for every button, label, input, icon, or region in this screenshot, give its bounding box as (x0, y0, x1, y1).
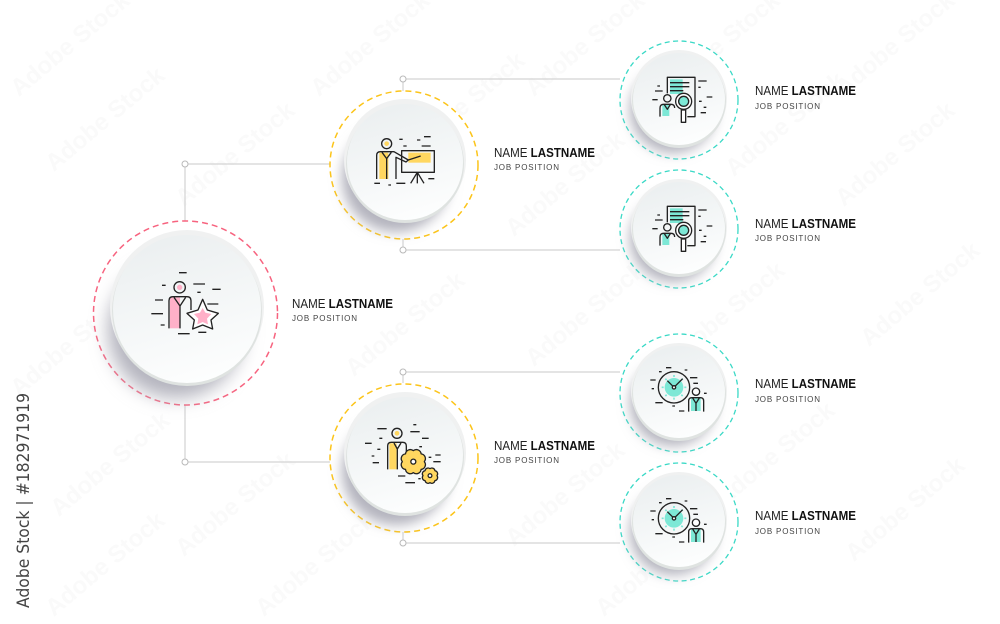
watermark pattern: Adobe Stock (40, 61, 171, 177)
text: upper manager name (494, 146, 595, 172)
watermark pattern: Adobe Stock (400, 46, 531, 162)
text: lower manager name: NAME LASTNAME (494, 439, 595, 453)
node: top-level manager (94, 221, 393, 405)
watermark pattern: Adobe Stock (520, 256, 651, 372)
node: report 1 (620, 41, 856, 159)
watermark pattern: Adobe Stock (840, 451, 971, 567)
watermark pattern: Adobe Stock (5, 286, 136, 402)
watermark pattern: Adobe Stock (340, 266, 471, 382)
watermark pattern: Adobe Stock (830, 96, 961, 212)
text: report 2 name: JOB POSITION (755, 234, 820, 243)
watermark pattern: Adobe Stock (500, 436, 631, 552)
icon: document with magnifier (652, 77, 712, 122)
text: report 3 name (755, 377, 856, 404)
text: report 3 name: JOB POSITION (755, 395, 820, 404)
node: report 3 (620, 334, 856, 452)
icon: person with gears (365, 425, 441, 483)
text: upper manager name: NAME LASTNAME (494, 146, 595, 160)
node: report 2 (620, 170, 856, 288)
watermark pattern: Adobe Stock (170, 446, 301, 562)
watermark pattern: Adobe Stock (660, 256, 791, 372)
icon: clock with person (650, 368, 707, 412)
node: upper manager (330, 91, 595, 239)
icon: presenter with board (374, 137, 434, 185)
connector lines (182, 76, 620, 546)
icon: document with magnifier (652, 206, 712, 251)
text: lower manager name (494, 439, 595, 465)
watermark pattern: Adobe Stock (45, 406, 176, 522)
text: report 1 name: JOB POSITION (755, 102, 820, 111)
watermark pattern: Adobe Stock (500, 126, 631, 242)
stock credit: Adobe Stock | #182971919 (14, 393, 34, 608)
watermark pattern: Adobe Stock (590, 506, 721, 622)
watermark pattern: Adobe Stock (40, 506, 171, 622)
text: report 4 name: NAME LASTNAME (755, 509, 856, 523)
text: lower manager name: JOB POSITION (494, 456, 559, 465)
text: report 2 name (755, 217, 856, 243)
watermark pattern: Adobe Stock (250, 506, 381, 622)
icon: person with star (151, 273, 221, 334)
icon: clock with person (650, 499, 707, 543)
node: lower manager (330, 384, 595, 532)
text: top-level name: NAME LASTNAME (292, 297, 393, 311)
text: report 2 name: NAME LASTNAME (755, 217, 856, 231)
watermark pattern: Adobe Stock (720, 66, 851, 182)
text: top-level name (292, 297, 393, 323)
text: report 4 name: JOB POSITION (755, 527, 820, 536)
text: report 1 name (755, 84, 856, 111)
text: upper manager name: JOB POSITION (494, 163, 559, 172)
watermark pattern: Adobe Stock (170, 96, 301, 212)
watermark pattern: Adobe Stock (710, 396, 841, 512)
text: report 4 name (755, 509, 856, 536)
text: report 1 name: NAME LASTNAME (755, 84, 856, 98)
text: top-level name: JOB POSITION (292, 314, 357, 323)
watermark pattern: Adobe Stock (855, 236, 986, 352)
node: report 4 (620, 463, 856, 581)
text: report 3 name: NAME LASTNAME (755, 377, 856, 391)
